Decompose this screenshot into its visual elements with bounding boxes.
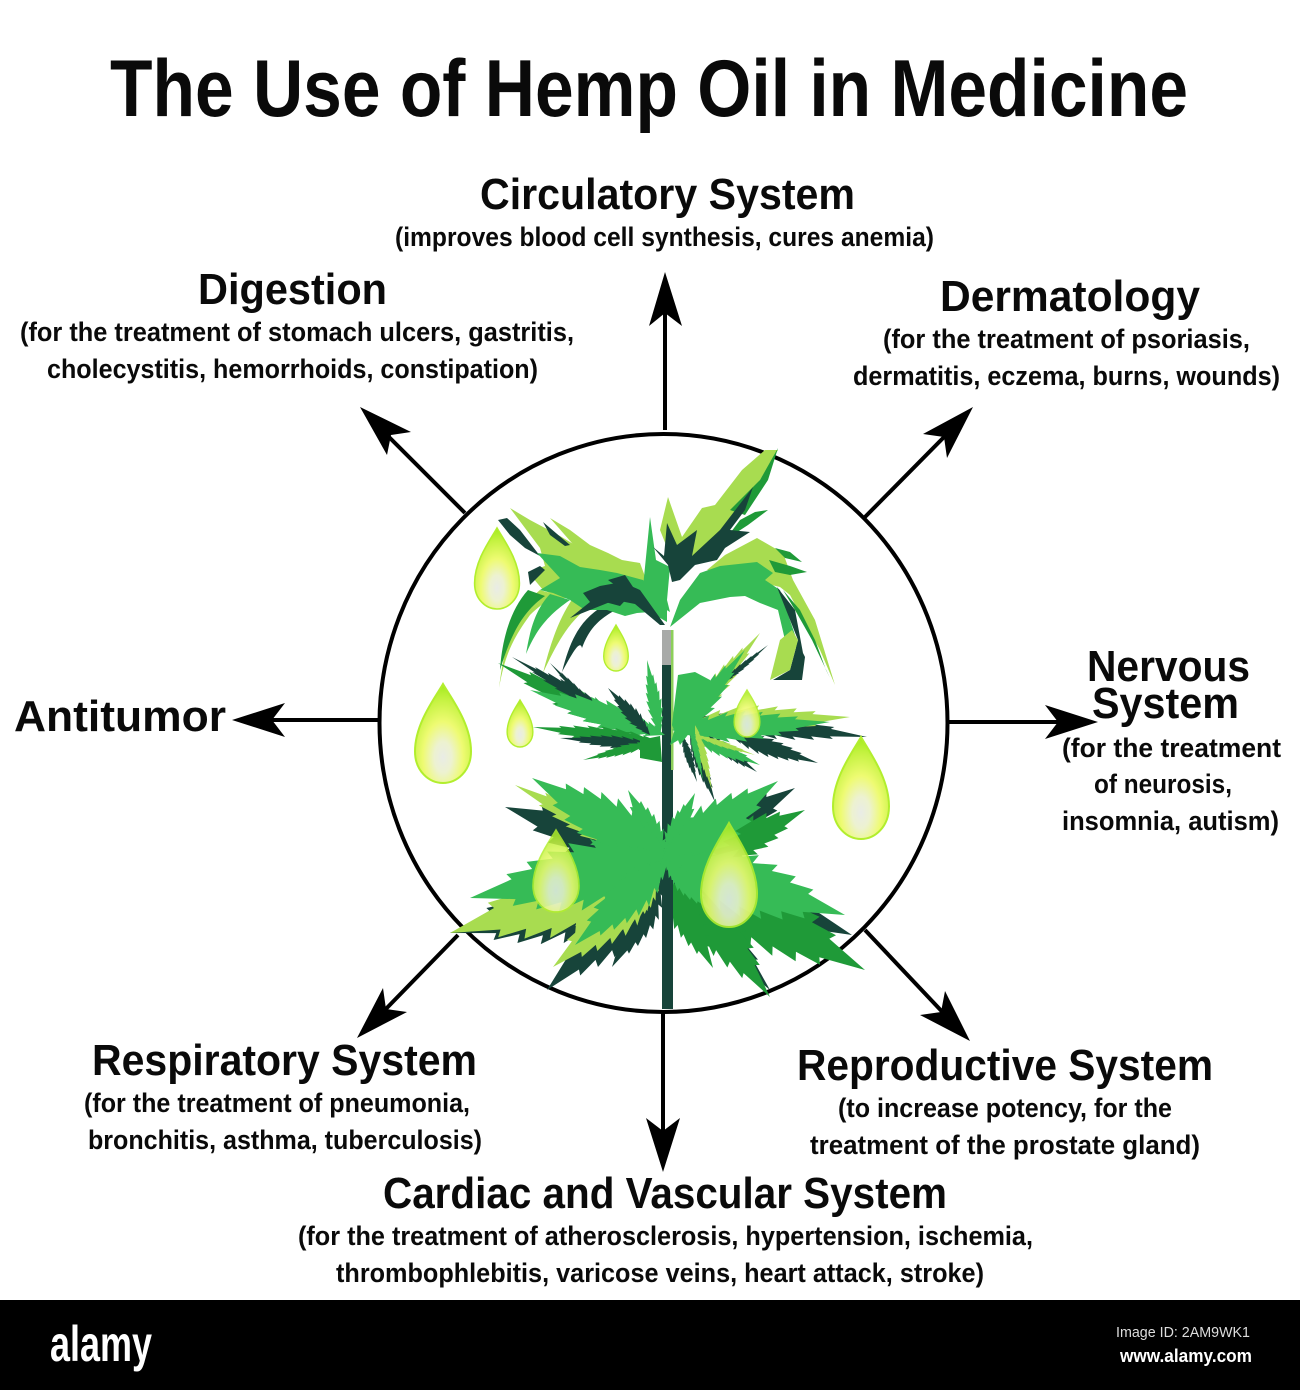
- footer image id: Image ID: 2AM9WK1: [1116, 1324, 1250, 1341]
- oil drop 3: [415, 684, 471, 783]
- label: reproductive system: Reproductive System: [797, 1041, 1213, 1090]
- label: nervous system: (for the treatment: [1062, 733, 1281, 763]
- arrow: to antitumor: [232, 703, 380, 737]
- label: nervous system: insomnia, autism): [1062, 806, 1279, 836]
- oil drop 5: [734, 690, 760, 737]
- oil drop 2: [604, 625, 628, 671]
- label: nervous system: of neurosis,: [1094, 769, 1232, 799]
- arrow: to nervous system: [947, 705, 1098, 739]
- oil drop 7: [533, 830, 579, 912]
- label: respiratory system: [84, 1036, 482, 1155]
- label: cardiac and vascular system: (for the treatment of atherosclerosis, hypertension, ischemia,: [298, 1221, 1033, 1251]
- label: dermatology: Dermatology: [940, 272, 1201, 321]
- oil drop 6: [833, 737, 889, 839]
- arrow: to dermatology: [865, 407, 973, 517]
- footer url: www.alamy.com: [1119, 1346, 1252, 1366]
- label: circulatory system: Circulatory System: [480, 170, 855, 219]
- label: circulatory system: [395, 170, 934, 252]
- label: dermatology: [853, 272, 1280, 391]
- footer bar: [0, 1300, 1300, 1390]
- label: digestion: [20, 265, 574, 384]
- label: respiratory system: (for the treatment of pneumonia,: [84, 1088, 470, 1118]
- plant stem: [662, 630, 674, 1009]
- arrow: to reproductive system: [865, 930, 970, 1041]
- label: antitumor: Antitumor: [14, 692, 226, 741]
- label: cardiac and vascular system: thrombophlebitis, varicose veins, heart attack, stroke): [336, 1258, 984, 1288]
- label: dermatology: dermatitis, eczema, burns, wounds): [853, 361, 1280, 391]
- label: reproductive system: [797, 1041, 1213, 1160]
- middle-right leaf: [660, 627, 869, 804]
- footer logo: alamy: [50, 1316, 152, 1372]
- label: digestion: cholecystitis, hemorrhoids, constipation): [47, 354, 538, 384]
- middle-left leaf: [492, 651, 670, 765]
- label: cardiac and vascular system: [298, 1169, 1033, 1288]
- oil drop 8: [701, 823, 757, 927]
- label: nervous system: [1062, 642, 1281, 836]
- arrow: up to circulatory: [649, 272, 682, 430]
- oil drops: [415, 528, 889, 927]
- label: dermatology: (for the treatment of psoriasis,: [883, 324, 1250, 354]
- arrow: to respiratory system: [357, 935, 458, 1038]
- arrow: to cardiac and vascular system: [646, 1012, 680, 1172]
- label: respiratory system: bronchitis, asthma, tuberculosis): [88, 1125, 482, 1155]
- label: nervous system: System: [1092, 679, 1239, 728]
- top-left leaf and arcs: [498, 508, 670, 688]
- central circle: [380, 434, 948, 1012]
- hemp plant illustration: [415, 448, 889, 1011]
- label: nervous system: Nervous: [1087, 642, 1250, 691]
- top-right leaf and arcs: [653, 448, 835, 685]
- label: respiratory system: Respiratory System: [92, 1036, 477, 1085]
- oil drop 4: [507, 700, 533, 747]
- arrow: to digestion: [360, 407, 465, 513]
- oil drop 1: [475, 528, 519, 609]
- label: reproductive system: (to increase potency, for the: [838, 1093, 1172, 1123]
- label: circulatory system: (improves blood cell synthesis, cures anemia): [395, 222, 934, 252]
- label: reproductive system: treatment of the prostate gland): [810, 1130, 1200, 1160]
- label: digestion: (for the treatment of stomach ulcers, gastritis,: [20, 317, 574, 347]
- label: digestion: Digestion: [198, 265, 387, 314]
- bottom leaf cluster: [439, 755, 882, 1011]
- label: cardiac and vascular system: Cardiac and Vascular System: [383, 1169, 947, 1218]
